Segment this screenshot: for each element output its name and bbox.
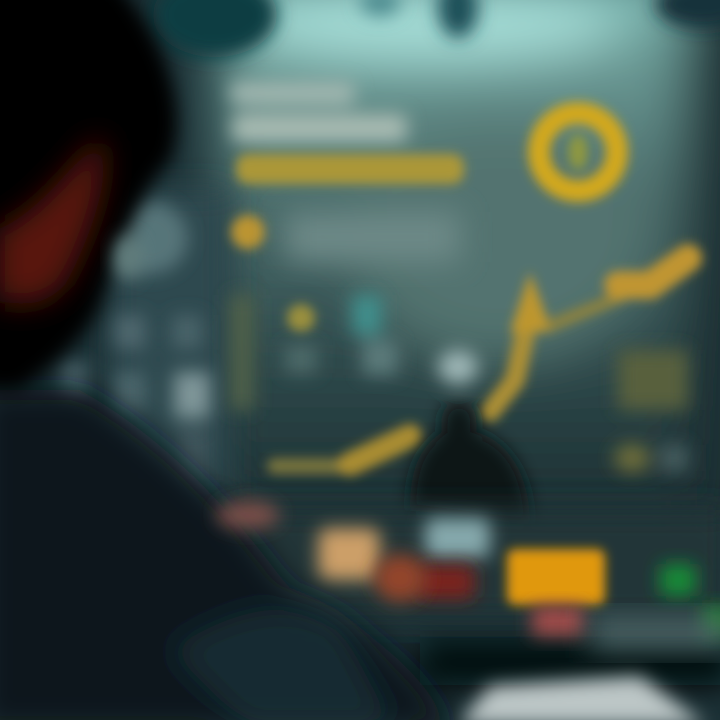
gold coin ring [539,113,617,191]
left screen columns [60,202,210,480]
button: pink [532,606,584,636]
gold headline bar [236,154,464,184]
button: teal white [425,518,490,558]
screen glow [215,0,720,540]
top dark shapes [153,0,720,57]
desk strip [590,618,720,648]
button: green [660,564,696,596]
presenter silhouette [410,350,530,525]
desk console glowing buttons [318,518,720,648]
foreground person head [0,0,177,390]
button: red [415,565,475,599]
desk band [230,510,720,685]
hand on console [216,501,426,602]
left wall panel [110,190,230,500]
face edge highlight [114,236,142,280]
paper on desk [458,676,705,720]
button: amber [507,549,605,605]
gold line chart [275,258,688,466]
face with red light [0,135,105,304]
button: green edge [702,606,720,636]
gold dots [231,215,315,332]
title lines [230,82,407,142]
button: pale orange [318,528,380,580]
text block next to dot [285,212,460,262]
foreground person body [0,390,450,720]
right side gold data blocks [614,350,688,472]
small teal and grey bars [230,295,398,410]
